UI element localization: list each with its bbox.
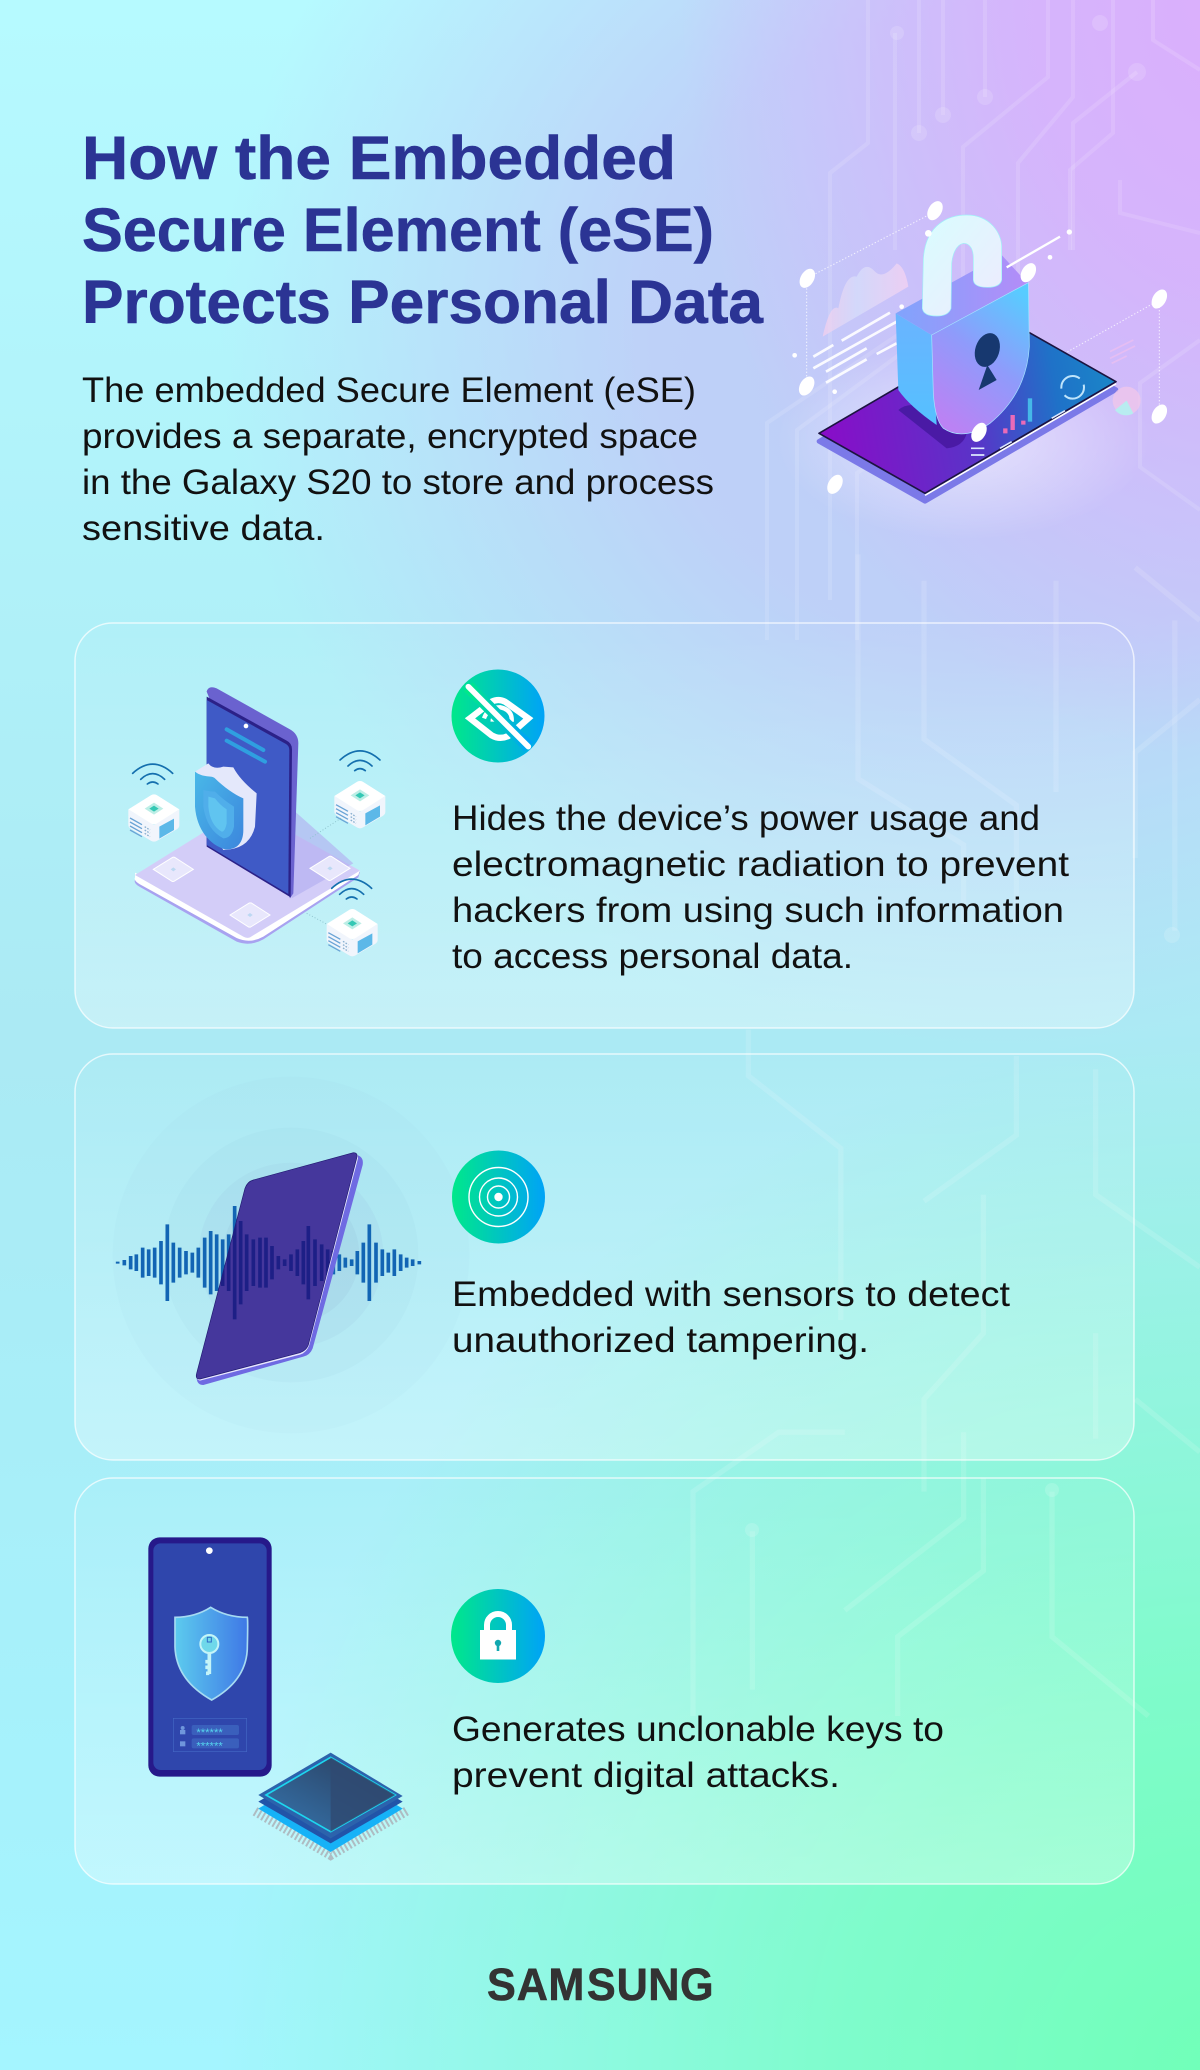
hero white nodes xyxy=(792,198,1170,497)
circuit background lines xyxy=(693,0,1200,1716)
intro text: in the Galaxy S20 to store and process xyxy=(82,463,714,502)
illustration: phone with key shield and chip: ****** xyxy=(196,1740,223,1752)
logo: Samsung: SAMSUNG xyxy=(487,1960,714,2010)
padlock xyxy=(896,215,1029,434)
hero area chart xyxy=(823,263,908,337)
chip xyxy=(255,1811,407,1855)
text: hides power usage: electromagnetic radiation to prevent xyxy=(452,845,1069,884)
hero illustration: padlock on phone xyxy=(777,198,1170,540)
illustration: phone with shield and modules xyxy=(128,687,385,956)
panel: unclonable keys xyxy=(75,1478,1134,1884)
shield xyxy=(195,763,257,850)
text: tamper sensors: unauthorized tampering. xyxy=(452,1321,869,1360)
hero data lines xyxy=(813,313,897,383)
panel: hides power usage xyxy=(75,623,1134,1028)
text: hides power usage: Hides the device’s power usage and xyxy=(452,799,1040,838)
icon: padlock xyxy=(451,1589,545,1683)
hero pie xyxy=(1110,340,1141,415)
shield with key xyxy=(175,1607,248,1700)
text: hides power usage: hackers from using such information xyxy=(452,891,1064,930)
hero phone xyxy=(819,322,1116,501)
text: tamper sensors: Embedded with sensors to detect xyxy=(452,1275,1010,1314)
text: hides power usage xyxy=(452,799,1069,976)
title xyxy=(82,124,764,336)
illustration: phone with key shield and chip: ****** xyxy=(196,1727,223,1739)
illustration: phone with sound wave xyxy=(116,1152,422,1385)
icon: concentric rings xyxy=(452,1150,545,1244)
icon: crossed-out eye xyxy=(452,670,544,762)
password box xyxy=(173,1718,247,1752)
text: unclonable keys: prevent digital attacks. xyxy=(452,1756,840,1795)
text: unclonable keys: Generates unclonable keys to xyxy=(452,1710,944,1749)
text: hides power usage: to access personal data. xyxy=(452,937,853,976)
intro text: provides a separate, encrypted space xyxy=(82,417,698,456)
panel: tamper sensors xyxy=(75,1054,1134,1460)
text: unclonable keys xyxy=(452,1710,944,1795)
phone xyxy=(207,687,298,898)
title: How the Embedded xyxy=(82,124,676,192)
intro text xyxy=(82,371,714,548)
text: tamper sensors xyxy=(452,1275,1010,1360)
title: Protects Personal Data xyxy=(82,268,764,336)
dotted links xyxy=(307,817,343,925)
modules xyxy=(128,794,179,842)
illustration: phone with key shield and chip xyxy=(148,1537,407,1855)
title: Secure Element (eSE) xyxy=(82,196,714,264)
hero dotted connectors xyxy=(807,212,1159,463)
intro text: sensitive data. xyxy=(82,509,325,548)
intro text: The embedded Secure Element (eSE) xyxy=(82,371,696,410)
